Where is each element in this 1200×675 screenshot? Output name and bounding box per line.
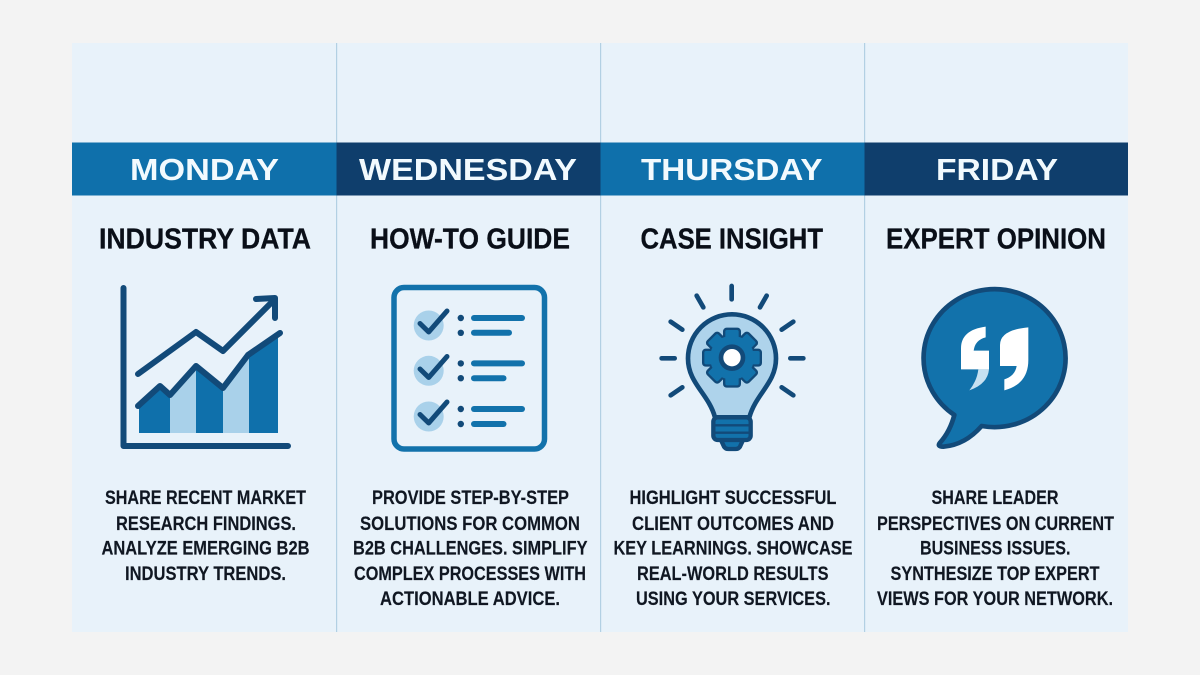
header: Monday: MONDAY bbox=[130, 152, 279, 187]
panel: Monday column bbox=[72, 142, 336, 585]
text: Thursday description bbox=[614, 488, 852, 610]
text: Friday description: VIEWS FOR YOUR NETWORK. bbox=[877, 589, 1113, 610]
heading: Case Insight: CASE INSIGHT bbox=[640, 224, 823, 256]
text: Monday description: SHARE RECENT MARKET bbox=[105, 488, 306, 509]
panel: Wednesday column bbox=[336, 142, 600, 610]
text: Wednesday description: ACTIONABLE ADVICE. bbox=[380, 589, 560, 610]
icon: lightbulb with gear bbox=[662, 286, 803, 449]
text: Thursday description: KEY LEARNINGS. SHOWCASE bbox=[614, 538, 852, 560]
text: Friday description bbox=[877, 488, 1114, 610]
header: Friday: FRIDAY bbox=[936, 152, 1058, 187]
icon: speech bubble with quotation marks bbox=[924, 289, 1066, 447]
header: Thursday bbox=[600, 142, 864, 196]
icon: rising bar and line chart bbox=[124, 288, 288, 446]
text: Wednesday description bbox=[353, 488, 588, 610]
header: Wednesday: WEDNESDAY bbox=[359, 152, 577, 187]
icon: checklist bbox=[394, 288, 544, 449]
text: Friday description: PERSPECTIVES ON CURRENT bbox=[877, 514, 1114, 535]
heading: How-To Guide: HOW-TO GUIDE bbox=[370, 224, 570, 256]
text: Wednesday description: B2B CHALLENGES. SIMPLIFY bbox=[353, 538, 588, 560]
text: Wednesday description: COMPLEX PROCESSES WITH bbox=[354, 564, 586, 585]
text: Wednesday description: PROVIDE STEP-BY-STEP bbox=[372, 488, 569, 509]
text: Friday description: SHARE LEADER bbox=[932, 488, 1059, 509]
text: Thursday description: CLIENT OUTCOMES AND bbox=[632, 514, 834, 535]
text: Monday description: RESEARCH FINDINGS. bbox=[116, 514, 296, 535]
text: Monday description: INDUSTRY TRENDS. bbox=[125, 564, 286, 585]
heading: Industry Data: INDUSTRY DATA bbox=[99, 224, 311, 256]
text: Thursday description: REAL-WORLD RESULTS bbox=[637, 564, 828, 585]
text: Monday description bbox=[102, 488, 310, 585]
text: Thursday description: USING YOUR SERVICES. bbox=[636, 589, 830, 610]
header: Wednesday bbox=[336, 142, 600, 196]
header: Monday bbox=[72, 142, 336, 196]
text: Monday description: ANALYZE EMERGING B2B bbox=[102, 538, 310, 560]
text: Friday description: SYNTHESIZE TOP EXPERT bbox=[890, 564, 1100, 585]
text: Thursday description: HIGHLIGHT SUCCESSFUL bbox=[630, 488, 837, 509]
panel: Thursday column bbox=[600, 142, 864, 610]
header: Thursday: THURSDAY bbox=[641, 152, 823, 187]
text: Wednesday description: SOLUTIONS FOR COMMON bbox=[360, 514, 580, 535]
panel: background bbox=[72, 43, 1128, 632]
text: Friday description: BUSINESS ISSUES. bbox=[920, 538, 1070, 560]
header: Friday bbox=[864, 142, 1128, 196]
heading: Expert Opinion: EXPERT OPINION bbox=[886, 224, 1106, 256]
panel: Friday column bbox=[864, 142, 1128, 610]
